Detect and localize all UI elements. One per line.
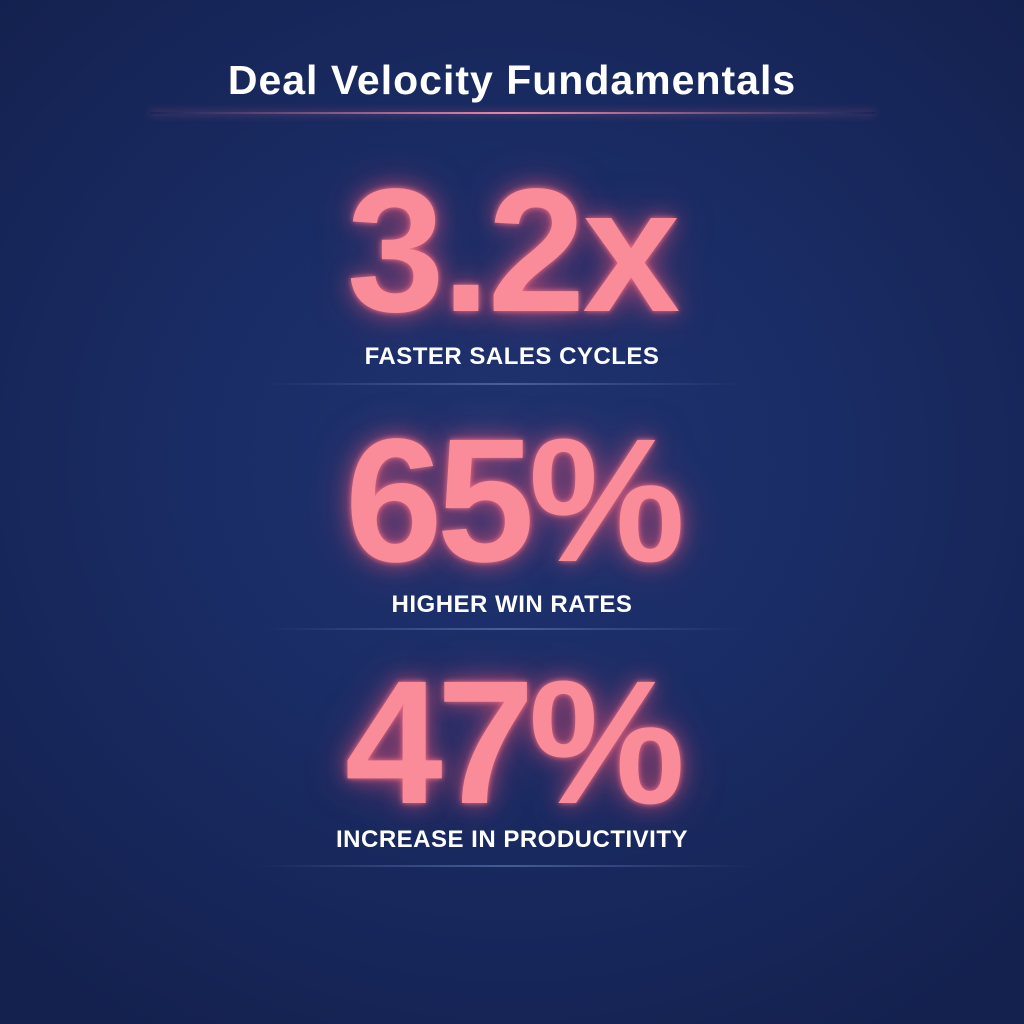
title divider — [150, 112, 875, 114]
label 2: HIGHER WIN RATES — [392, 591, 632, 618]
label 1: FASTER SALES CYCLES — [365, 343, 659, 370]
number 65%: 65% — [345, 403, 679, 599]
label 3: INCREASE IN PRODUCTIVITY — [336, 826, 688, 853]
number 47%: 47% — [345, 645, 679, 841]
title: Deal Velocity Fundamentals — [228, 57, 796, 103]
number 3.2x: 3.2x — [347, 153, 677, 349]
